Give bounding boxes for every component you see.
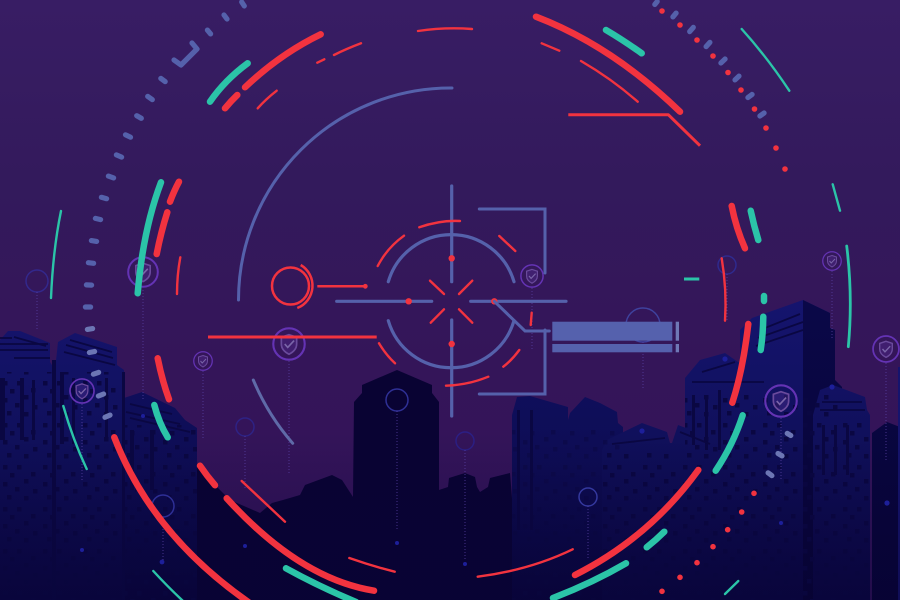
- crosshair centre ticks: [430, 281, 472, 323]
- icon: shield badge 3: [194, 352, 212, 370]
- red pointer line, left: [208, 336, 377, 338]
- red ring marker with pointer: [272, 265, 368, 308]
- bottom shadow over skyline: [0, 430, 900, 600]
- large blue scope arcs: [238, 88, 452, 443]
- crosshair circle: [388, 235, 514, 368]
- skyline: left towers: [0, 331, 197, 600]
- glow dots on buildings: [80, 356, 890, 566]
- blue radial tick ring: left: [85, 2, 244, 417]
- crosshair: [337, 186, 566, 416]
- dotted connector lines: [37, 271, 886, 560]
- icon: shield badge 4: [273, 328, 305, 360]
- red pointer line, top right: [568, 115, 700, 146]
- icon: shield badge 5: [521, 265, 543, 287]
- icon: shield badge 2: [70, 379, 94, 403]
- skyline: far silhouette: [197, 370, 520, 600]
- status bars: [552, 322, 679, 352]
- faint target circles: [26, 256, 736, 450]
- thick teal arcs: [138, 30, 764, 600]
- red broken ring: [378, 221, 532, 386]
- icon: shield badge 1: [128, 257, 158, 287]
- red dot ring: [659, 8, 788, 594]
- thick red arcs: [114, 17, 748, 600]
- shield badges: [70, 252, 899, 417]
- thin red arcs: [177, 28, 726, 577]
- blue radial tick ring: right: [655, 2, 791, 476]
- icon: shield badge 7: [823, 252, 841, 270]
- icon: shield badge 6: [765, 385, 797, 417]
- building-level target circles: [152, 389, 597, 517]
- icon: shield badge 8: [873, 336, 899, 362]
- crosshair red dots: [406, 255, 497, 347]
- crosshair lines: [337, 186, 566, 416]
- blue brackets and connector: [479, 209, 549, 394]
- skyline: right towers: [512, 300, 900, 600]
